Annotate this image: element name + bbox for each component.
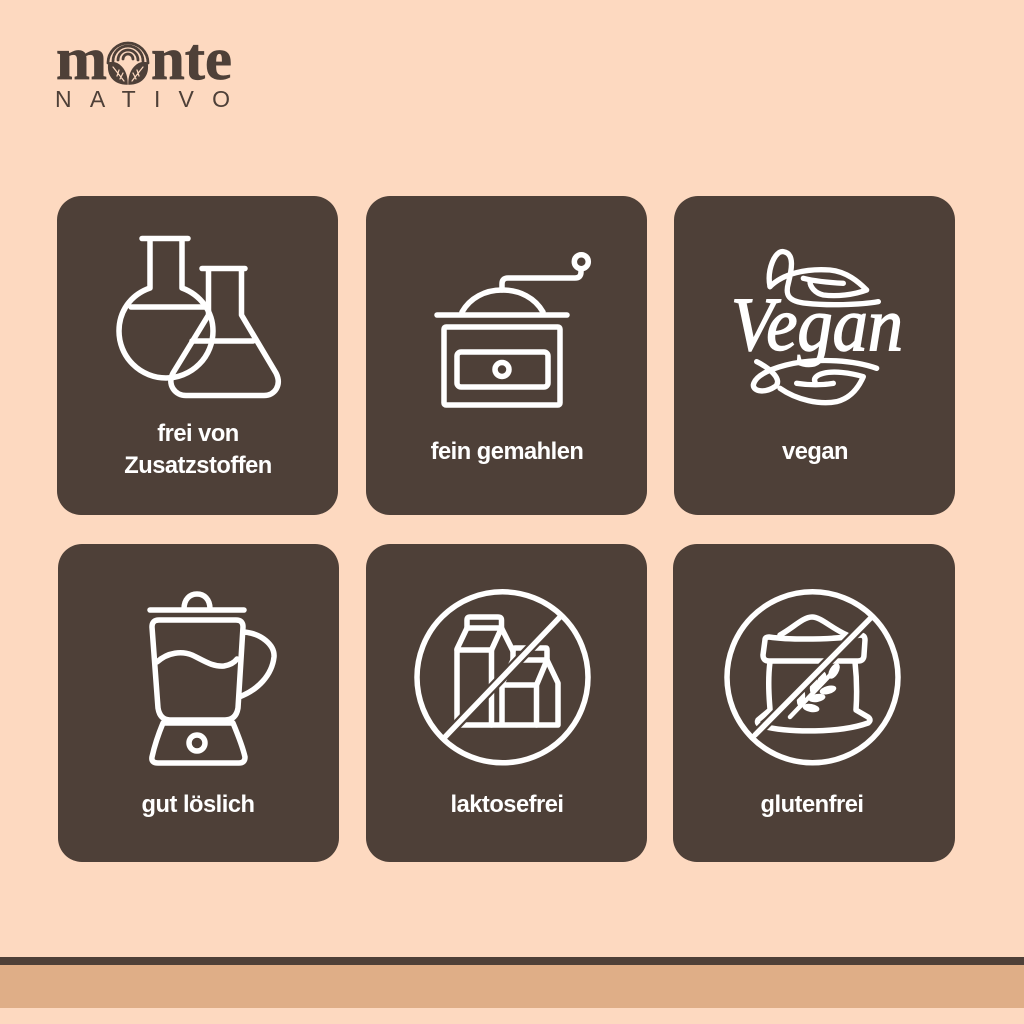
label: frei von [157,421,239,447]
wordmark nativo: NATIVO [55,86,230,112]
footer band [0,957,1024,1008]
panel: gut löslich [58,544,339,862]
wheat ear [790,662,841,717]
label: gut löslich [142,792,254,818]
panel: frei von Zusatzstoffen [57,196,338,515]
icon: crossed milk cartons [417,592,588,763]
label: laktosefrei [450,792,564,818]
label: Zusatzstoffen [124,453,272,479]
label: glutenfrei [761,792,863,818]
panel: glutenfrei [673,544,955,862]
Vegan script word: Vegan [731,283,903,367]
wordmark letter m: m [56,26,107,92]
icon: flasks [119,238,278,396]
wordmark letters nte: nte [151,26,232,92]
label: fein gemahlen [431,439,583,465]
panel: laktosefrei [366,544,647,862]
label: vegan [782,439,848,465]
panel: vegan [674,196,955,515]
icon: logo emblem with arcs and leaves [108,43,148,84]
icon: vegan lettering with leaves [731,252,903,403]
icon: crossed flour sack [727,592,898,763]
logo: monte nativo [55,26,232,112]
panel: fein gemahlen [366,196,647,515]
icon: coffee grinder [437,255,588,405]
icon: blender [150,594,274,763]
